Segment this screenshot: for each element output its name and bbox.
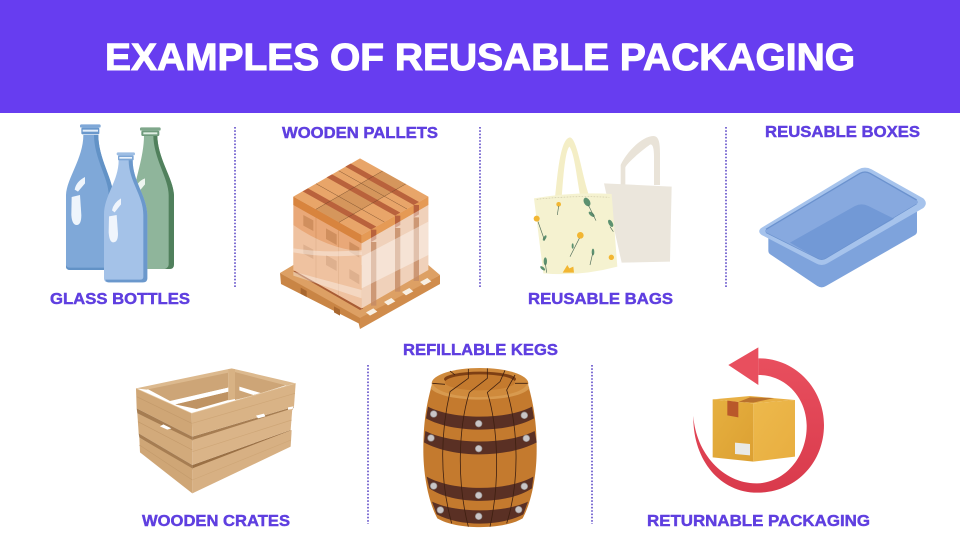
crate left slats: [136, 388, 192, 493]
label: reusable bags: REUSABLE BAGS: [528, 291, 673, 308]
top face with straps: [293, 158, 428, 243]
label: wooden pallets: WOODEN PALLETS: [282, 125, 438, 142]
title: EXAMPLES OF REUSABLE PACKAGING: [105, 37, 855, 79]
tub outer walls: [768, 203, 917, 287]
iron bands: [424, 407, 537, 524]
label: refillable kegs: REFILLABLE KEGS: [403, 342, 558, 359]
crate interior: [136, 368, 296, 409]
label: wooden crates: WOODEN CRATES: [142, 513, 290, 530]
icon: blue plastic tub: [759, 168, 926, 287]
floral cream bag: [534, 137, 617, 274]
plain beige bag: [604, 136, 672, 263]
stacked boxes: [293, 197, 428, 308]
icon: tote bags: [534, 136, 672, 274]
icon: wrapped pallet of boxes: [280, 158, 440, 329]
icon: glass bottles: [66, 124, 174, 282]
icon: returnable package with arrow: [693, 347, 824, 493]
icon: wooden crate: [136, 368, 296, 493]
tub inner floor: [790, 204, 894, 260]
stretch wrap: [293, 205, 428, 308]
label: reusable boxes: REUSABLE BOXES: [765, 124, 920, 141]
barrel body: [423, 383, 537, 527]
crate right slats: [136, 383, 296, 493]
tub inner walls: [765, 172, 918, 260]
tall blue bottle: [66, 124, 113, 270]
wooden pallet base: [280, 265, 440, 329]
barrel top: [431, 368, 529, 400]
rivets: [428, 411, 530, 520]
header banner: [0, 0, 960, 113]
label: returnable packaging: RETURNABLE PACKAGING: [647, 513, 870, 530]
small blue bottle: [104, 152, 147, 282]
green bottle: [134, 127, 174, 269]
label: glass bottles: GLASS BOTTLES: [50, 291, 190, 308]
return arrow: [693, 347, 824, 493]
icon: wooden barrel: [423, 368, 537, 527]
cardboard box: [713, 396, 795, 462]
tub rim: [759, 168, 926, 265]
stave lines: [432, 368, 528, 527]
